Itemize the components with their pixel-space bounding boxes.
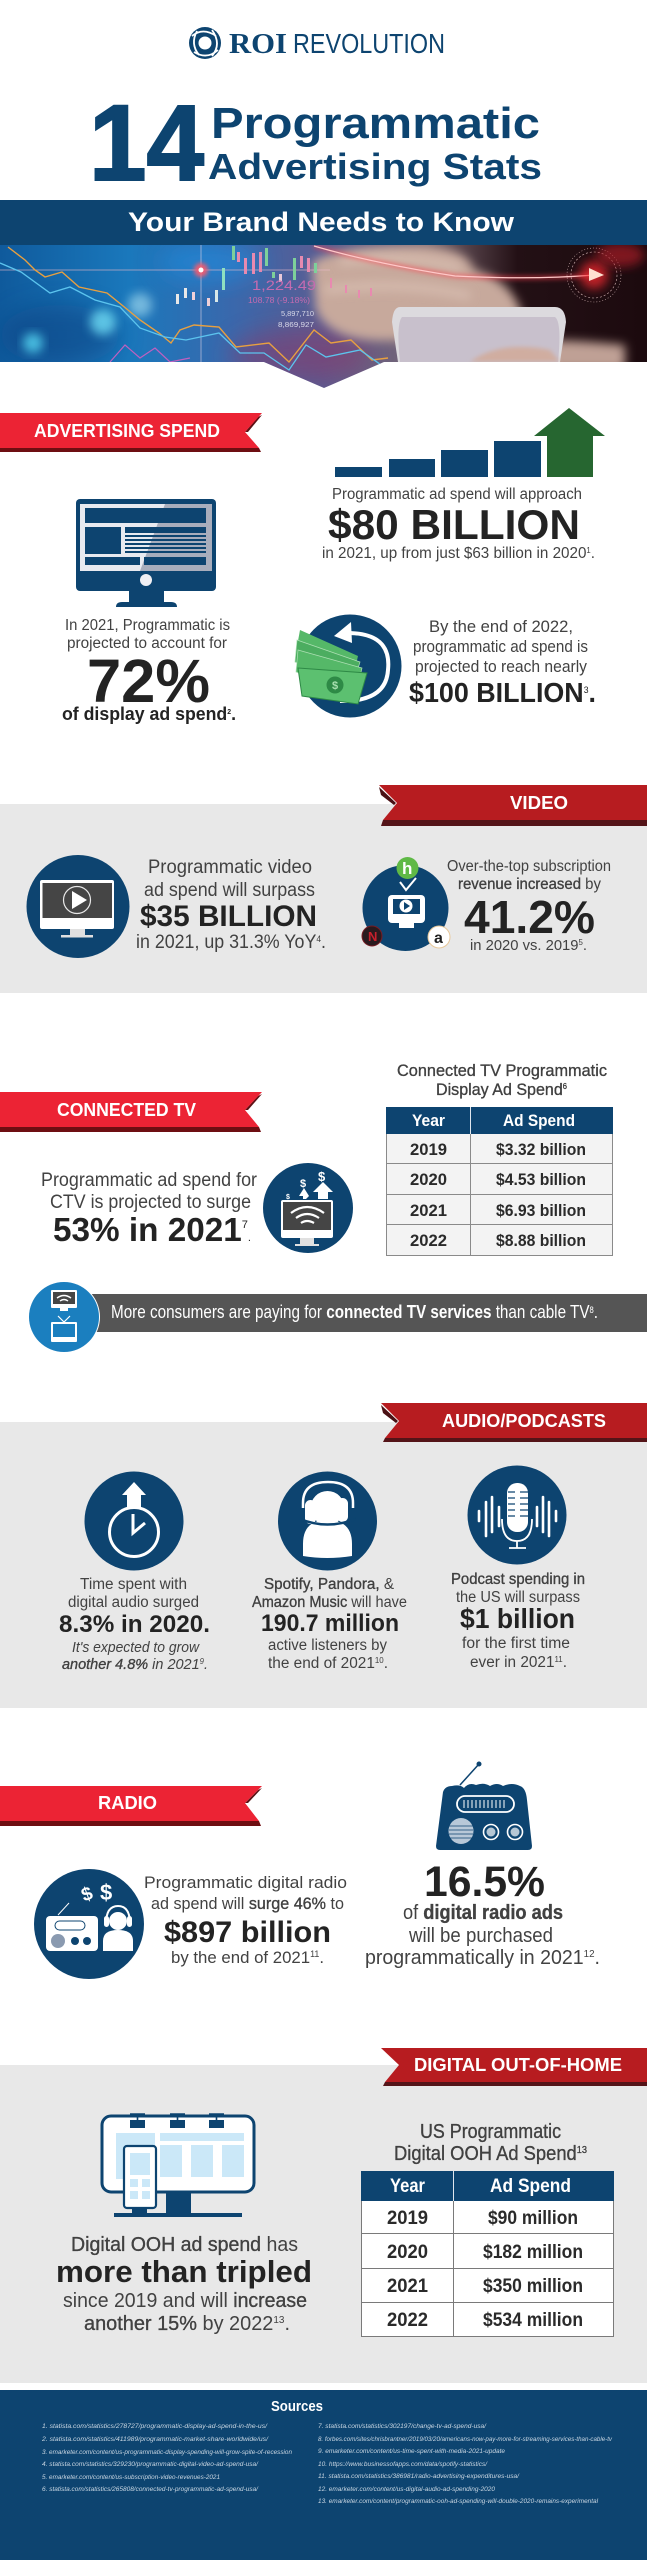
stat: time spent with digital audio: another 4.8% in 2021 — [62, 1656, 202, 1673]
stat: 35 billion: 4 — [316, 934, 321, 944]
panel: radio — [0, 1762, 600, 1979]
icon: podcast microphone — [468, 1466, 566, 1564]
ribbon: connected TV: CONNECTED TV — [57, 1100, 196, 1120]
stat: 72 percent: 2 — [227, 709, 231, 716]
stat: 35 billion: in 2021, up 31.3% YoY — [136, 932, 328, 953]
stat: more than tripled: more than tripled — [56, 2254, 312, 2289]
stat: 72 percent: . — [231, 704, 236, 724]
table: digital OOH ad spend: 2019 — [387, 2208, 428, 2229]
subtitle band — [0, 200, 647, 245]
table: digital OOH ad spend: $534 million — [483, 2310, 583, 2331]
stat: 72 percent: 72% — [87, 647, 210, 715]
ribbon: connected TV — [0, 1092, 262, 1132]
table: digital OOH ad spend: 2021 — [387, 2276, 428, 2297]
stat: 190.7 million listeners: active listeners by — [268, 1637, 387, 1654]
callout: more consumers pay for connected TV: . — [594, 1302, 598, 1322]
source list: right column: 11. statista.com/statistics/386981/radio-advertising-expenditures-usa/ — [318, 2473, 520, 2480]
source list: right column — [318, 2423, 613, 2505]
stat: 35 billion: ad spend will surpass — [144, 880, 315, 901]
stat: 53 percent in 2021: 53% in 2021 — [53, 1211, 240, 1248]
stat: 72 percent: of display ad spend — [62, 704, 230, 724]
icon: radio and listener — [34, 1869, 144, 1979]
stat: 80 billion: in 2021, up from just $63 billion in 2020 — [322, 545, 592, 562]
panel: sources footer — [0, 2390, 647, 2560]
stat: 190.7 million listeners: the end of 2021 — [268, 1655, 376, 1672]
stat: 897 billion: ad spend will surge 46% to — [151, 1894, 344, 1913]
stat: more than tripled: since 2019 and will increase — [63, 2290, 307, 2312]
stat: 897 billion: Programmatic digital radio — [144, 1873, 347, 1892]
stat: 35 billion — [136, 857, 326, 953]
source list: left column: 6. statista.com/statistics/265808/connected-tv-programmatic-ad-spend-usa/ — [42, 2486, 259, 2493]
stat: 35 billion: . — [321, 932, 326, 953]
table: digital OOH ad spend: 2022 — [387, 2310, 428, 2331]
stat: more than tripled: . — [284, 2313, 290, 2335]
stat: time spent with digital audio: 9 — [200, 1657, 205, 1666]
panel: advertising spend — [0, 408, 605, 724]
stat: 100 billion: By the end of 2022, — [429, 617, 573, 636]
source list: right column: 9. emarketer.com/content/us-time-spent-with-media-2021-update — [318, 2448, 505, 2455]
ribbon: audio/podcasts — [381, 1403, 647, 1442]
stat: 80 billion — [322, 486, 595, 562]
stat: 100 billion — [409, 617, 596, 708]
table: connected TV ad spend: $4.53 billion — [496, 1170, 586, 1189]
table: connected TV ad spend: 2021 — [410, 1201, 447, 1220]
title: Programmatic — [211, 99, 540, 148]
stat: 41.2 percent: 41.2% — [464, 891, 595, 943]
stat: 41.2 percent — [447, 858, 611, 954]
table: digital OOH ad spend: 13 — [577, 2145, 587, 2156]
table: digital OOH ad spend: Digital OOH Ad Spend — [394, 2143, 593, 2165]
stat: 897 billion — [144, 1873, 347, 1967]
source list: left column: 1. statista.com/statistics/278727/programmatic-display-ad-spend-in-the-us/ — [42, 2423, 268, 2430]
table: connected TV ad spend: Ad Spend — [503, 1111, 575, 1130]
stat: 80 billion: Programmatic ad spend will approach — [332, 486, 582, 503]
icon: radio and listener: $ — [79, 1883, 96, 1906]
stat: 80 billion: . — [591, 545, 595, 562]
panel: video — [0, 785, 647, 993]
stat: 41.2 percent: revenue increased by — [458, 876, 601, 893]
ribbon: advertising spend — [0, 413, 262, 452]
chart: rising bars with arrow — [335, 408, 605, 477]
stat: 16.5 percent: will be purchased — [408, 1925, 553, 1947]
hero image: financial charts and phone: 8,869,927 — [278, 322, 314, 329]
stat: 80 billion: $80 BILLION — [328, 501, 580, 548]
stat: time spent with digital audio: It's expected to grow — [72, 1639, 200, 1656]
hero image: financial charts and phone: 1,224.49 — [252, 277, 316, 293]
title — [89, 82, 542, 203]
icon: TV with streaming logos: a — [434, 930, 443, 947]
stat: more than tripled: another 15% by 2022 — [84, 2313, 274, 2335]
stat: 72 percent — [62, 617, 236, 724]
icon: money with circular arrow — [295, 614, 402, 718]
table: connected TV ad spend: $3.32 billion — [496, 1140, 586, 1159]
stat: 80 billion: 1 — [586, 546, 591, 555]
source list: right column: 7. statista.com/statistics/302197/change-tv-ad-spend-usa/ — [318, 2423, 487, 2430]
callout: more consumers pay for connected TV — [28, 1281, 647, 1353]
source list: left column: 4. statista.com/statistics/329230/programmatic-digital-video-ad-spend-usa/ — [42, 2461, 259, 2468]
stat: 190.7 million listeners: 10 — [375, 1656, 384, 1665]
ribbon: audio/podcasts: AUDIO/PODCASTS — [442, 1411, 606, 1431]
stat: 190.7 million listeners: . — [384, 1655, 388, 1672]
callout: more consumers pay for connected TV: More consumers are paying for connected TV services than cable TV — [111, 1302, 607, 1322]
stat: 16.5 percent: of digital radio ads — [403, 1902, 563, 1924]
stat: podcast spending: the US will surpass — [456, 1589, 580, 1606]
stat: podcast spending — [451, 1571, 585, 1671]
stat: 897 billion: $897 billion — [164, 1916, 331, 1949]
table: connected TV ad spend: 2019 — [410, 1140, 447, 1159]
stat: 100 billion: programmatic ad spend is — [413, 637, 588, 656]
source list: left column: 5. emarketer.com/content/us-subscription-video-revenues-2021 — [42, 2474, 220, 2481]
stat: time spent with digital audio: 8.3% in 2020. — [59, 1611, 210, 1638]
table: connected TV ad spend: 2022 — [410, 1231, 447, 1250]
panel: connected TV — [0, 1061, 647, 1353]
stat: 100 billion: . — [589, 677, 596, 708]
stat: 35 billion: $35 BILLION — [140, 900, 317, 933]
candlesticks — [176, 246, 372, 306]
ribbon: radio — [0, 1786, 262, 1826]
icon: stopwatch with up arrow — [84, 1472, 184, 1570]
stat: 41.2 percent: . — [583, 937, 587, 954]
table: digital OOH ad spend: Year — [390, 2176, 426, 2197]
logo: ROI Revolution: ROI — [229, 29, 287, 60]
stat: 72 percent: projected to account for — [67, 635, 227, 652]
ribbon: advertising spend: ADVERTISING SPEND — [34, 421, 220, 441]
stat: 16.5 percent — [365, 1858, 600, 1969]
table: digital OOH ad spend: US Programmatic — [420, 2121, 561, 2143]
stat: 53 percent in 2021: Programmatic ad spend for — [41, 1170, 258, 1191]
table: connected TV ad spend: 6 — [563, 1082, 568, 1091]
table: digital OOH ad spend: $350 million — [483, 2276, 583, 2297]
stat: 41.2 percent: in 2020 vs. 2019 — [470, 937, 580, 954]
stat: 100 billion: projected to reach nearly — [415, 657, 587, 676]
table: digital OOH ad spend: Ad Spend — [490, 2176, 571, 2197]
hero image: financial charts and phone: 5,897,710 — [281, 311, 314, 318]
stat: 190.7 million listeners — [252, 1576, 407, 1672]
stat: 190.7 million listeners: 190.7 million — [261, 1610, 399, 1637]
stat: 53 percent in 2021 — [41, 1170, 258, 1248]
stat: podcast spending: Podcast spending in — [451, 1571, 585, 1588]
stat: time spent with digital audio: . — [204, 1656, 208, 1673]
ribbon: digital out-of-home — [381, 2048, 647, 2086]
heading: sources: Sources — [271, 2398, 323, 2415]
table: connected TV ad spend: Connected TV Programmatic — [397, 1061, 607, 1080]
stat: 16.5 percent: 16.5% — [424, 1858, 545, 1906]
stat: podcast spending: $1 billion — [460, 1603, 575, 1634]
stat: podcast spending: . — [563, 1654, 567, 1671]
hero image: financial charts and phone: 108.78 (-9.18%) — [248, 296, 310, 305]
table: connected TV ad spend: $6.93 billion — [496, 1201, 586, 1220]
icon: radio — [436, 1762, 532, 1850]
stat: 16.5 percent: programmatically in 2021 — [365, 1947, 588, 1969]
icon: listener with headphones — [278, 1472, 377, 1570]
icon: radio and listener: $ — [100, 1880, 112, 1905]
table: connected TV ad spend: Year — [412, 1111, 445, 1130]
stat: 53 percent in 2021: . — [248, 1232, 251, 1244]
stat: 897 billion: 11 — [310, 1949, 319, 1959]
stat: 897 billion: . — [319, 1948, 324, 1967]
logo: ROI Revolution — [189, 27, 445, 60]
icon: money with circular arrow: $ — [332, 680, 338, 692]
ribbon: video: VIDEO — [510, 793, 568, 813]
icon: connected monitor: $ — [318, 1169, 326, 1184]
title: Advertising Stats — [208, 146, 542, 187]
callout: more consumers pay for connected TV: 8 — [590, 1305, 594, 1315]
icon: TV with streaming logos: h — [402, 859, 412, 878]
stat: 190.7 million listeners: Amazon Music will have — [252, 1594, 407, 1611]
source list: right column: 8. forbes.com/sites/chrisbrantner/2019/03/20/americans-now-pay-more-for-streaming-services-than-cable-tv — [318, 2436, 613, 2443]
phone — [392, 307, 566, 362]
stat: 897 billion: by the end of 2021 — [171, 1948, 312, 1967]
table: digital OOH ad spend — [361, 2121, 614, 2337]
stat: 100 billion: $100 BILLION — [409, 677, 591, 708]
stat: more than tripled: Digital OOH ad spend has — [71, 2234, 298, 2256]
stat: 72 percent: In 2021, Programmatic is — [65, 617, 230, 634]
stat: podcast spending: ever in 2021 — [470, 1654, 555, 1671]
stat: more than tripled: 13 — [273, 2315, 285, 2326]
source list: right column: 10. https://www.businessofapps.com/data/spotify-statistics/ — [318, 2461, 488, 2468]
panel: audio and podcasts — [0, 1403, 647, 1708]
table: connected TV ad spend: $8.88 billion — [496, 1231, 586, 1250]
table: digital OOH ad spend: $182 million — [483, 2242, 583, 2263]
table: connected TV ad spend: 2020 — [410, 1170, 447, 1189]
stat: 41.2 percent: 5 — [578, 938, 583, 947]
stat: podcast spending: 11 — [554, 1655, 563, 1664]
table: digital OOH ad spend: $90 million — [488, 2208, 578, 2229]
panel: digital out-of-home — [0, 2048, 647, 2383]
stat: 100 billion: 3 — [584, 685, 589, 695]
hand — [312, 246, 524, 350]
stat: more than tripled — [56, 2234, 312, 2335]
icon: desktop monitor — [76, 499, 216, 607]
red arrow curve — [314, 246, 595, 278]
stat: 41.2 percent: Over-the-top subscription — [447, 858, 611, 875]
stat: 53 percent in 2021: 7 — [242, 1219, 248, 1231]
source list: right column: 12. emarketer.com/content/us-digital-audio-ad-spending-2020 — [318, 2486, 495, 2493]
source list: left column: 2. statista.com/statistics/411989/programmatic-market-share-worldwide/us/ — [41, 2436, 269, 2443]
source list: right column: 13. emarketer.com/content/programmatic-ooh-ad-spending-will-double-2020-remains-experimental — [318, 2498, 599, 2505]
ribbon: radio: RADIO — [98, 1793, 157, 1813]
table: connected TV ad spend: Display Ad Spend — [436, 1080, 570, 1099]
stat: 35 billion: Programmatic video — [148, 857, 312, 878]
stat: 190.7 million listeners: Spotify, Pandora, & — [264, 1576, 395, 1593]
table: connected TV ad spend — [386, 1061, 613, 1256]
source list: left column — [41, 2423, 292, 2493]
icon: logo swirl — [189, 27, 221, 59]
table: digital OOH ad spend: 2020 — [387, 2242, 428, 2263]
ribbon: digital out-of-home: DIGITAL OUT-OF-HOME — [414, 2055, 622, 2075]
stat: time spent with digital audio: digital audio surged — [68, 1594, 199, 1611]
icon: connected monitor: $ — [286, 1194, 290, 1201]
stat: 16.5 percent: 12 — [584, 1949, 595, 1960]
icon: monitor with play button — [26, 855, 130, 958]
icon: connected monitor: $ — [300, 1178, 306, 1190]
icon: connected monitor — [263, 1163, 353, 1253]
stat: time spent with digital audio — [59, 1576, 210, 1673]
subtitle band: Your Brand Needs to Know — [128, 207, 515, 237]
ribbon: video — [379, 785, 647, 826]
source list: left column: 3. emarketer.com/content/us-programmatic-display-spending-will-grow-spite-of-recession — [42, 2449, 292, 2456]
stat: 16.5 percent: . — [595, 1947, 600, 1969]
logo: ROI Revolution: REVOLUTION — [293, 28, 445, 59]
hero image: financial charts and phone — [0, 242, 647, 388]
icon: billboard and phone kiosk — [102, 2114, 254, 2217]
icon: TV with streaming logos — [362, 857, 450, 951]
stat: podcast spending: for the first time — [462, 1635, 570, 1652]
title: 14 — [89, 82, 204, 203]
stat: time spent with digital audio: Time spent with — [80, 1576, 187, 1593]
icon: TV with streaming logos: N — [368, 929, 377, 944]
stat: 53 percent in 2021: CTV is projected to surge — [50, 1192, 251, 1213]
